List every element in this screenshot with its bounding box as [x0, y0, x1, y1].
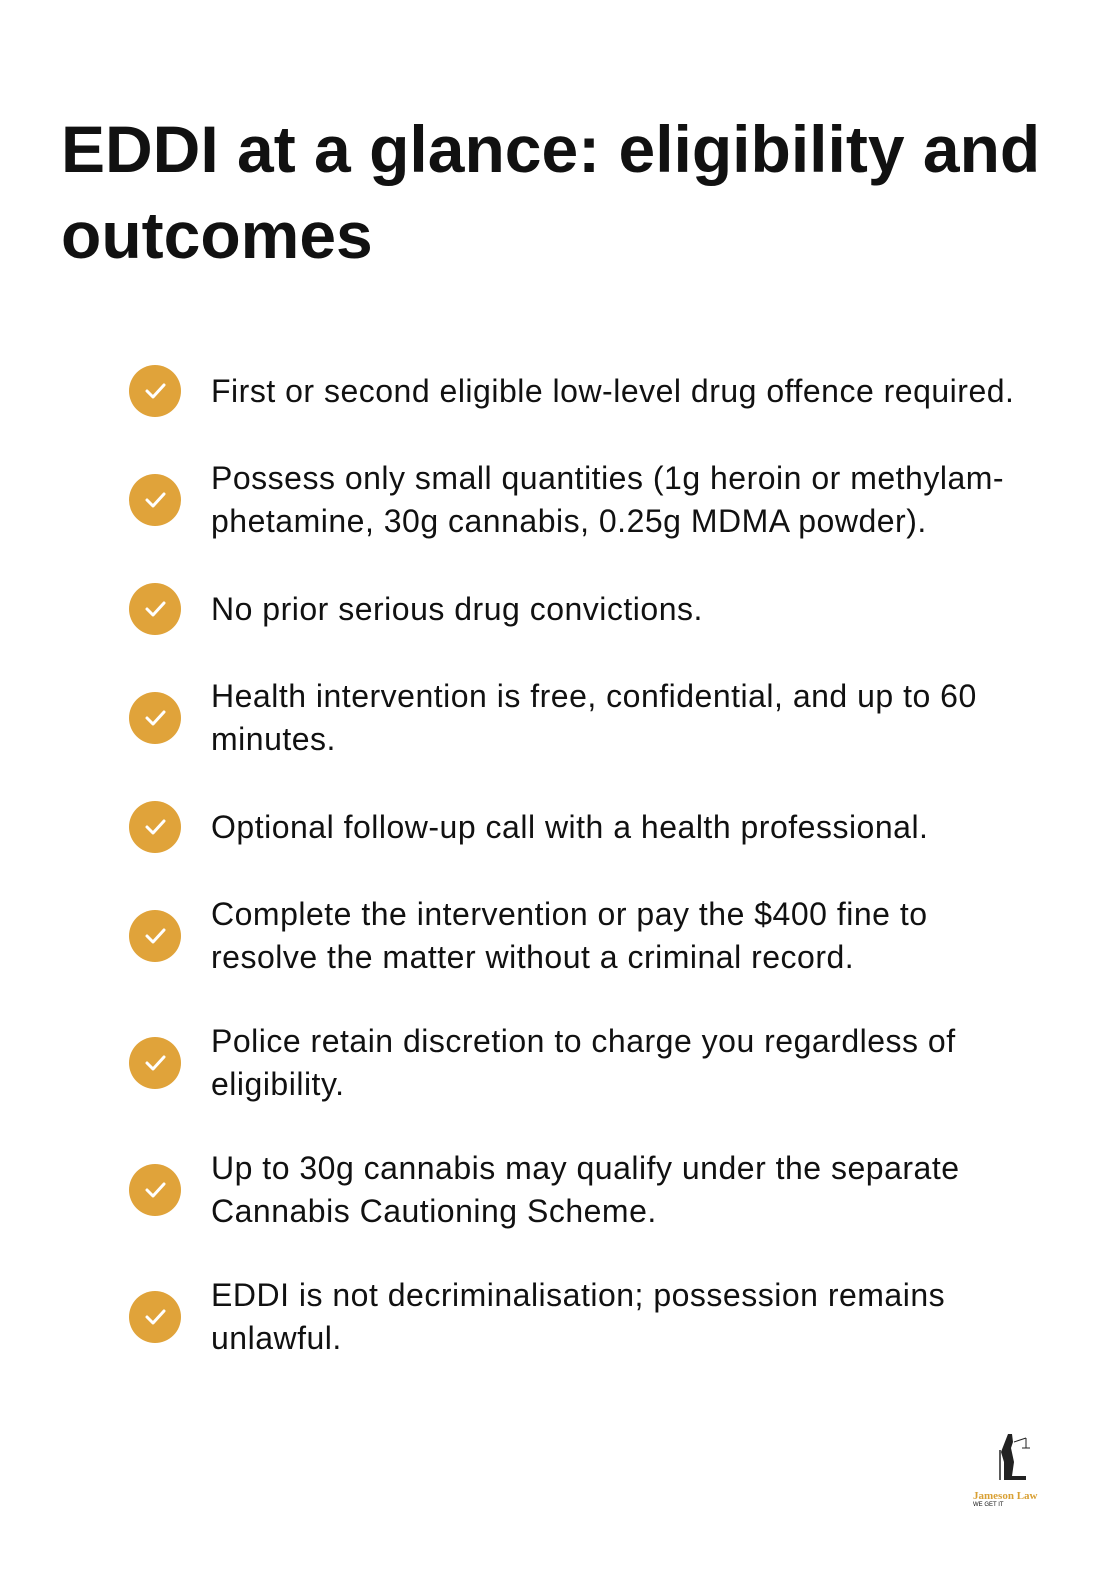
item 6: Complete the intervention or pay the $400 fine to — [211, 896, 928, 932]
item 2: Possess only small quantities (1g heroin or methylam- — [211, 460, 1004, 496]
item 7 — [129, 1023, 956, 1102]
icon: check — [129, 365, 181, 417]
icon: check — [129, 801, 181, 853]
item 4 — [129, 678, 977, 757]
item 8: Up to 30g cannabis may qualify under the separate — [211, 1150, 960, 1186]
item 9 — [129, 1277, 945, 1356]
logo: WE GET IT — [973, 1502, 1004, 1508]
item 7: eligibility. — [211, 1066, 344, 1102]
item 4: minutes. — [211, 721, 336, 757]
icon: check — [129, 692, 181, 744]
item 1: First or second eligible low-level drug offence required. — [211, 373, 1014, 409]
item 4: Health intervention is free, confidential, and up to 60 — [211, 678, 977, 714]
item 9: unlawful. — [211, 1320, 342, 1356]
item 1 — [129, 365, 1014, 417]
item 2: phetamine, 30g cannabis, 0.25g MDMA powder). — [211, 503, 927, 539]
item 8: Cannabis Cautioning Scheme. — [211, 1193, 657, 1229]
item 3: No prior serious drug convictions. — [211, 591, 703, 627]
item 6 — [129, 896, 928, 975]
icon: check — [129, 910, 181, 962]
logo — [973, 1434, 1038, 1508]
item 8 — [129, 1150, 960, 1229]
item 7: Police retain discretion to charge you regardless of — [211, 1023, 956, 1059]
logo: Jameson Law — [973, 1490, 1037, 1502]
icon: check — [129, 474, 181, 526]
item 2 — [129, 460, 1004, 539]
icon: check — [129, 1164, 181, 1216]
icon: check — [129, 1291, 181, 1343]
item 5 — [129, 801, 928, 853]
item 9: EDDI is not decriminalisation; possession remains — [211, 1277, 945, 1313]
title: EDDI at a glance: eligibility and outcomes — [61, 112, 1040, 272]
item 3 — [129, 583, 703, 635]
item 6: resolve the matter without a criminal record. — [211, 939, 854, 975]
icon: check — [129, 1037, 181, 1089]
item 5: Optional follow-up call with a health professional. — [211, 809, 928, 845]
icon: check — [129, 583, 181, 635]
